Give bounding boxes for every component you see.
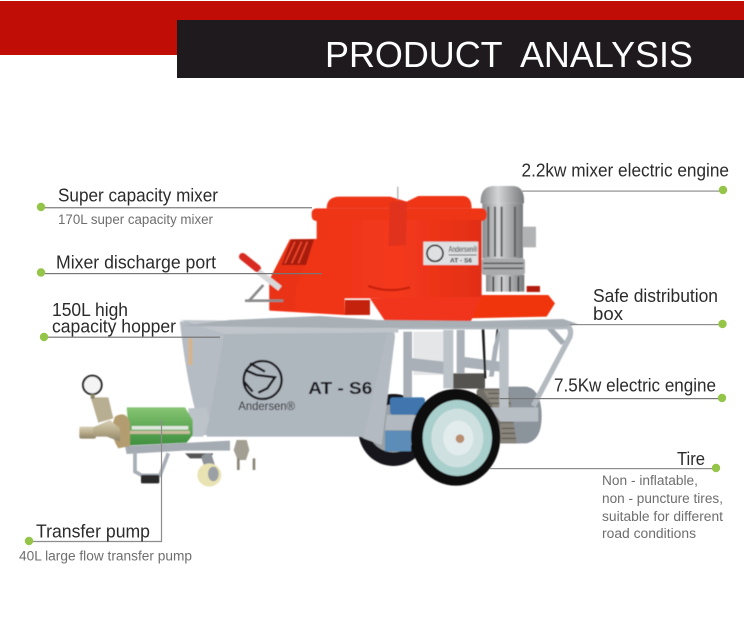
transfer pump: [79, 376, 254, 487]
hopper logo: [238, 361, 295, 413]
callout: distribution box: box: [593, 304, 623, 324]
2.2kw motor: [481, 186, 540, 292]
callout: tire: Non - inflatable,: [602, 473, 698, 488]
callout: hopper: [40, 300, 220, 341]
callout: super capacity mixer: 170L super capacity mixer: [58, 212, 213, 227]
callout: transfer pump: 40L large flow transfer pump: [19, 549, 192, 564]
header: black title bar: [177, 20, 744, 78]
callout: mixer discharge port: [37, 253, 322, 277]
callout: tire: road conditions: [602, 526, 696, 541]
under frame: [350, 326, 571, 430]
callout: super capacity mixer: [37, 186, 312, 227]
title: PRODUCT ANALYSIS: [325, 34, 693, 75]
front wheel: [411, 389, 500, 486]
callout: 2.2kw engine: [522, 161, 729, 194]
callout: transfer pump: Transfer pump: [36, 522, 150, 542]
rear wheel: [358, 394, 428, 466]
callout: distribution box: [570, 286, 727, 328]
callout: hopper: capacity hopper: [52, 317, 176, 337]
callout: tire: [490, 449, 723, 541]
discharge chute: [269, 238, 370, 315]
callout: 7.5kw engine: 7.5Kw electric engine: [554, 376, 716, 396]
hopper logo: Andersen®: [238, 400, 295, 413]
lever: [243, 257, 283, 302]
callout: mixer discharge port: Mixer discharge port: [56, 253, 216, 273]
callout: super capacity mixer: Super capacity mixer: [58, 186, 218, 206]
callout: tire: suitable for different: [602, 509, 723, 524]
header: red band: [0, 1, 744, 55]
mixer tank: [312, 187, 487, 323]
electric engine: [452, 373, 542, 443]
callout: distribution box: Safe distribution: [593, 286, 718, 306]
callout: tire: non - puncture tires,: [602, 491, 723, 506]
mixer: [243, 186, 555, 323]
callout: 2.2kw engine: 2.2kw mixer electric engine: [522, 161, 729, 181]
callout: tire: Tire: [677, 449, 705, 469]
nameplate: AT - S6: [450, 257, 472, 264]
callout: transfer pump: [19, 420, 192, 564]
machine illustration: [79, 186, 578, 487]
hopper: [180, 320, 398, 445]
top rail: [180, 316, 578, 328]
callout: hopper: 150L high: [52, 300, 128, 320]
mixer base plate: [467, 295, 555, 318]
blue pump: [385, 397, 425, 451]
hopper model name: AT - S6: [308, 378, 372, 398]
nameplate: Andersen®: [449, 245, 477, 254]
callout: 7.5kw engine: [500, 376, 726, 402]
nameplate: [423, 242, 478, 265]
